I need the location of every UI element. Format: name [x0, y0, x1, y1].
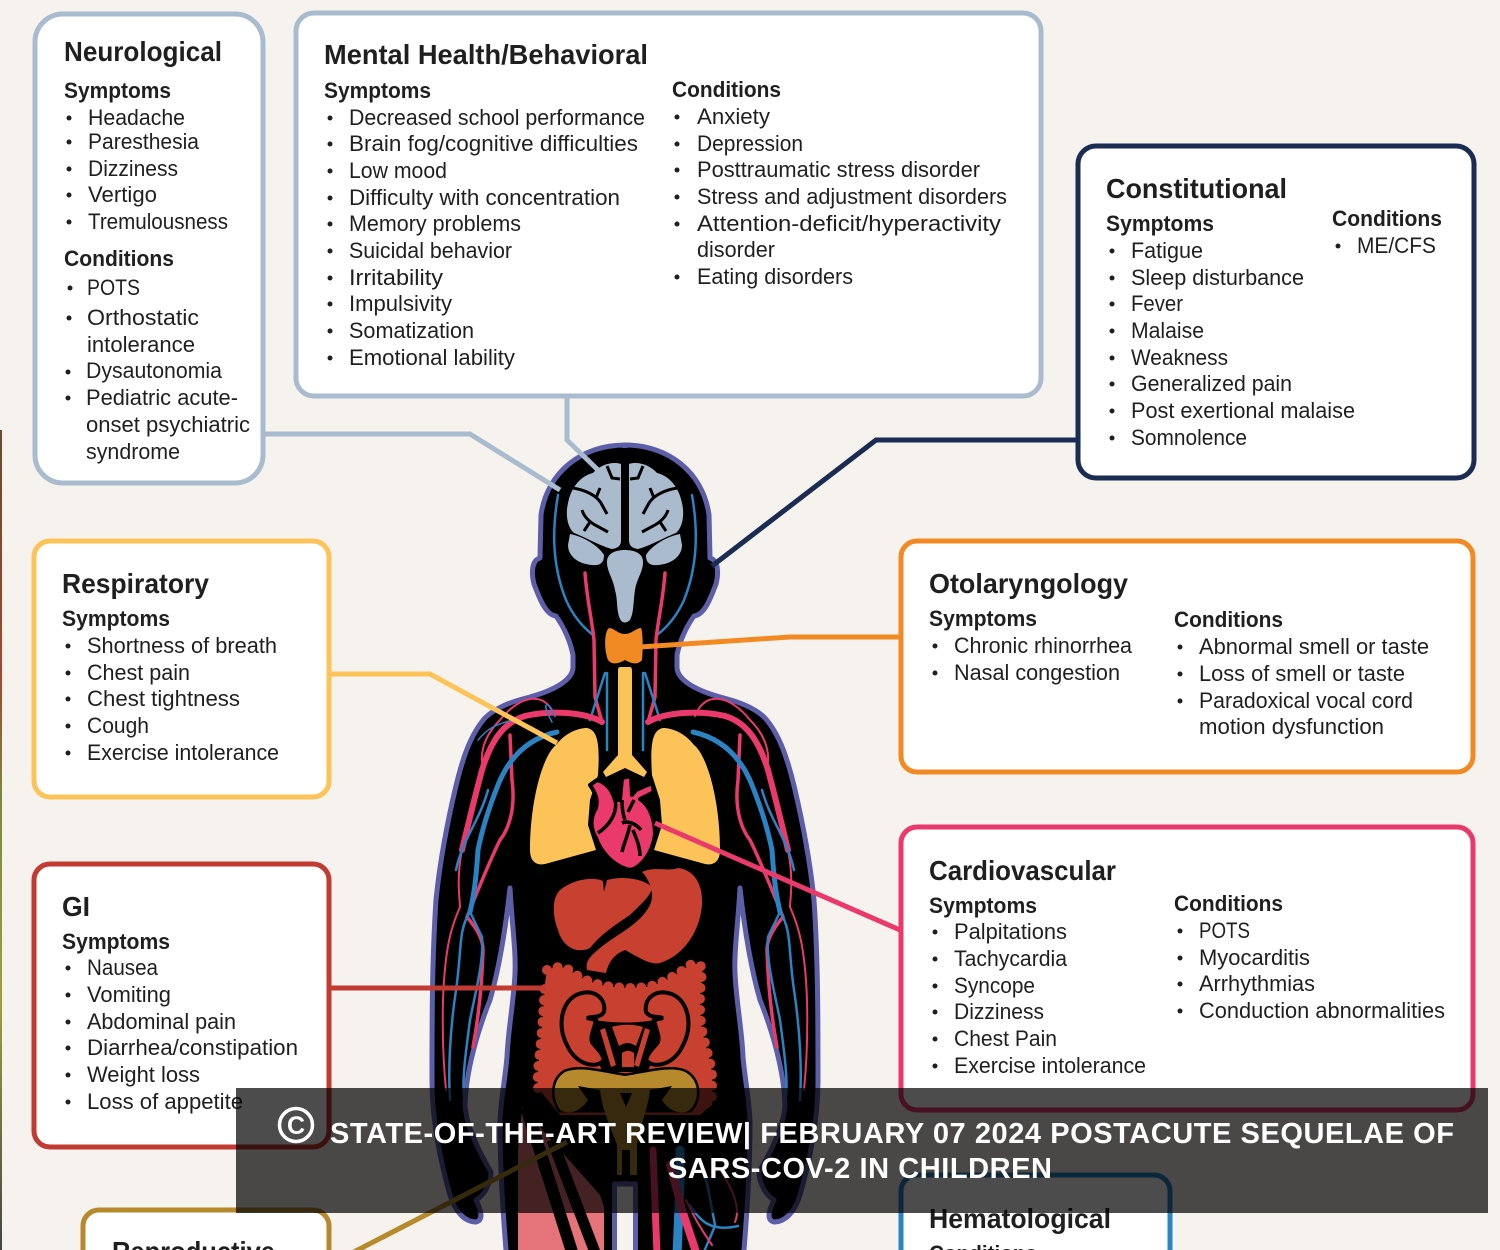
constitutional symptoms: Generalized pain — [1131, 371, 1292, 396]
otolaryngology symptoms: Nasal congestion — [954, 660, 1120, 685]
panel: GI — [34, 864, 329, 1147]
neurological symptoms — [64, 78, 228, 234]
heading: cardiovascular: Cardiovascular — [929, 855, 1116, 886]
body silhouette — [432, 445, 818, 1250]
respiratory symptoms: Cough — [87, 713, 149, 738]
constitutional symptoms: Sleep disturbance — [1131, 265, 1304, 290]
icon: copyright: C — [287, 1112, 305, 1140]
constitutional symptoms: Fatigue — [1131, 238, 1203, 263]
cardiovascular symptoms: Exercise intolerance — [954, 1053, 1146, 1078]
icon: copyright — [280, 1108, 312, 1142]
constitutional symptoms: Somnolence — [1131, 425, 1247, 450]
panel: mental health/behavioral — [296, 13, 1041, 396]
otolaryngology symptoms — [929, 606, 1133, 685]
GI symptoms: Abdominal pain — [87, 1009, 236, 1034]
mental health conditions: Depression — [697, 131, 803, 156]
panel: otolaryngology — [901, 541, 1473, 772]
neurological conditions — [64, 246, 250, 464]
neurological symptoms: Vertigo — [88, 182, 157, 207]
panel: hematological — [901, 1175, 1170, 1250]
connector lines — [263, 396, 1078, 1250]
cardiovascular conditions: Myocarditis — [1199, 945, 1310, 970]
brain folds — [573, 466, 677, 532]
constitutional conditions: ME/CFS — [1357, 233, 1436, 258]
constitutional symptoms — [1106, 211, 1355, 450]
cardiovascular conditions: Arrhythmias — [1199, 971, 1315, 996]
cardiovascular symptoms: Dizziness — [954, 999, 1044, 1024]
respiratory symptoms: Chest pain — [87, 660, 190, 685]
respiratory symptoms — [62, 606, 279, 765]
mental health conditions: Attention-deficit/hyperactivity — [697, 211, 1001, 236]
mental health symptoms: Difficulty with concentration — [349, 185, 620, 210]
otolaryngology conditions — [1174, 607, 1429, 739]
neurological symptoms: Symptoms — [64, 78, 171, 103]
intestines — [538, 964, 712, 1115]
cardiovascular symptoms: Palpitations — [954, 919, 1067, 944]
constitutional symptoms: Post exertional malaise — [1131, 398, 1355, 423]
cardiovascular conditions: POTS — [1199, 918, 1250, 943]
neurological symptoms: Headache — [88, 105, 185, 130]
panel: neurological — [35, 14, 263, 483]
GI symptoms: Loss of appetite — [87, 1089, 243, 1114]
mental health conditions — [672, 77, 1007, 289]
panel: constitutional — [1078, 146, 1474, 478]
heading: otolaryngology: Otolaryngology — [929, 568, 1128, 599]
otolaryngology conditions: Paradoxical vocal cord — [1199, 688, 1413, 713]
heading: constitutional: Constitutional — [1106, 173, 1287, 204]
lungs — [530, 728, 720, 864]
banner text: STATE-OF-THE-ART REVIEW| FEBRUARY 07 2024 POSTACUTE SEQUELAE OF — [330, 1118, 1454, 1150]
liver and stomach — [554, 868, 702, 973]
cardiovascular symptoms — [929, 893, 1146, 1078]
constitutional symptoms: Malaise — [1131, 318, 1204, 343]
constitutional symptoms: Fever — [1131, 291, 1183, 316]
copyright banner — [236, 1088, 1488, 1213]
mental health conditions: Anxiety — [697, 104, 770, 129]
banner text — [330, 1118, 1454, 1185]
constitutional conditions: Conditions — [1332, 206, 1442, 231]
cardiovascular symptoms: Tachycardia — [954, 946, 1068, 971]
respiratory symptoms: Shortness of breath — [87, 633, 277, 658]
cardiovascular conditions: Conditions — [1174, 891, 1283, 916]
neurological conditions: POTS — [87, 275, 140, 300]
trachea and bronchi — [603, 667, 647, 777]
neurological conditions: syndrome — [86, 439, 180, 464]
constitutional symptoms: Symptoms — [1106, 211, 1214, 236]
mental health conditions: Conditions — [672, 77, 781, 102]
blood vessels: right side — [643, 495, 807, 1100]
mental health symptoms — [324, 78, 645, 370]
GI symptoms: Diarrhea/constipation — [87, 1035, 298, 1060]
mental health symptoms: Brain fog/cognitive difficulties — [349, 131, 638, 156]
mental health conditions: Stress and adjustment disorders — [697, 184, 1007, 209]
neurological conditions: Orthostatic — [87, 305, 199, 330]
neurological conditions: Conditions — [64, 246, 174, 271]
panel: cardiovascular — [901, 827, 1473, 1110]
otolaryngology conditions: Conditions — [1174, 607, 1283, 632]
neurological conditions: intolerance — [87, 332, 195, 357]
cardiovascular symptoms: Symptoms — [929, 893, 1037, 918]
leg muscles and vessels — [518, 1107, 738, 1250]
panel: reproductive — [83, 1210, 329, 1250]
otolaryngology symptoms: Chronic rhinorrhea — [954, 633, 1133, 658]
respiratory symptoms: Chest tightness — [87, 686, 240, 711]
heading: GI: GI — [62, 891, 90, 922]
neurological symptoms: Tremulousness — [88, 209, 228, 234]
body illustration — [432, 445, 818, 1250]
cardiovascular conditions: Conduction abnormalities — [1199, 998, 1445, 1023]
mental health symptoms: Emotional lability — [349, 345, 515, 370]
mental health conditions: disorder — [697, 237, 775, 262]
blood vessels: left side — [443, 495, 607, 1100]
respiratory symptoms: Exercise intolerance — [87, 740, 279, 765]
mental health symptoms: Impulsivity — [349, 291, 452, 316]
mental health symptoms: Low mood — [349, 158, 447, 183]
mental health symptoms: Memory problems — [349, 211, 521, 236]
mental health symptoms: Decreased school performance — [349, 105, 645, 130]
neurological conditions: onset psychiatric — [86, 412, 250, 437]
heading: hematological: Hematological — [929, 1203, 1111, 1234]
mental health symptoms: Irritability — [349, 265, 443, 290]
neurological conditions: Dysautonomia — [86, 358, 223, 383]
cardiovascular symptoms: Syncope — [954, 973, 1035, 998]
heading: respiratory: Respiratory — [62, 568, 209, 599]
larynx — [605, 628, 643, 663]
neurological conditions: Pediatric acute- — [86, 385, 238, 410]
GI symptoms: Symptoms — [62, 929, 170, 954]
constitutional symptoms: Weakness — [1131, 345, 1228, 370]
otolaryngology conditions: Abnormal smell or taste — [1199, 634, 1429, 659]
respiratory symptoms: Symptoms — [62, 606, 170, 631]
brain — [567, 463, 683, 623]
GI symptoms — [62, 929, 298, 1114]
neurological symptoms: Paresthesia — [88, 129, 200, 154]
heading: mental health/behavioral: Mental Health/Behavioral — [324, 39, 648, 70]
mental health symptoms: Symptoms — [324, 78, 431, 103]
panel: respiratory — [34, 541, 329, 797]
otolaryngology symptoms: Symptoms — [929, 606, 1037, 631]
banner text: SARS-COV-2 IN CHILDREN — [668, 1153, 1052, 1185]
mental health conditions: Posttraumatic stress disorder — [697, 157, 980, 182]
uterus — [555, 1069, 697, 1175]
mental health symptoms: Somatization — [349, 318, 474, 343]
mental health conditions: Eating disorders — [697, 264, 853, 289]
GI symptoms: Vomiting — [87, 982, 171, 1007]
cardiovascular symptoms: Chest Pain — [954, 1026, 1057, 1051]
kidneys — [562, 992, 688, 1072]
otolaryngology conditions: Loss of smell or taste — [1199, 661, 1405, 686]
mental health symptoms: Suicidal behavior — [349, 238, 512, 263]
heading: neurological: Neurological — [64, 36, 222, 67]
GI symptoms: Nausea — [87, 955, 159, 980]
heart — [590, 776, 655, 870]
constitutional conditions — [1332, 206, 1442, 258]
GI symptoms: Weight loss — [87, 1062, 200, 1087]
neurological symptoms: Dizziness — [88, 156, 178, 181]
otolaryngology conditions: motion dysfunction — [1199, 714, 1384, 739]
cardiovascular conditions — [1174, 891, 1445, 1023]
